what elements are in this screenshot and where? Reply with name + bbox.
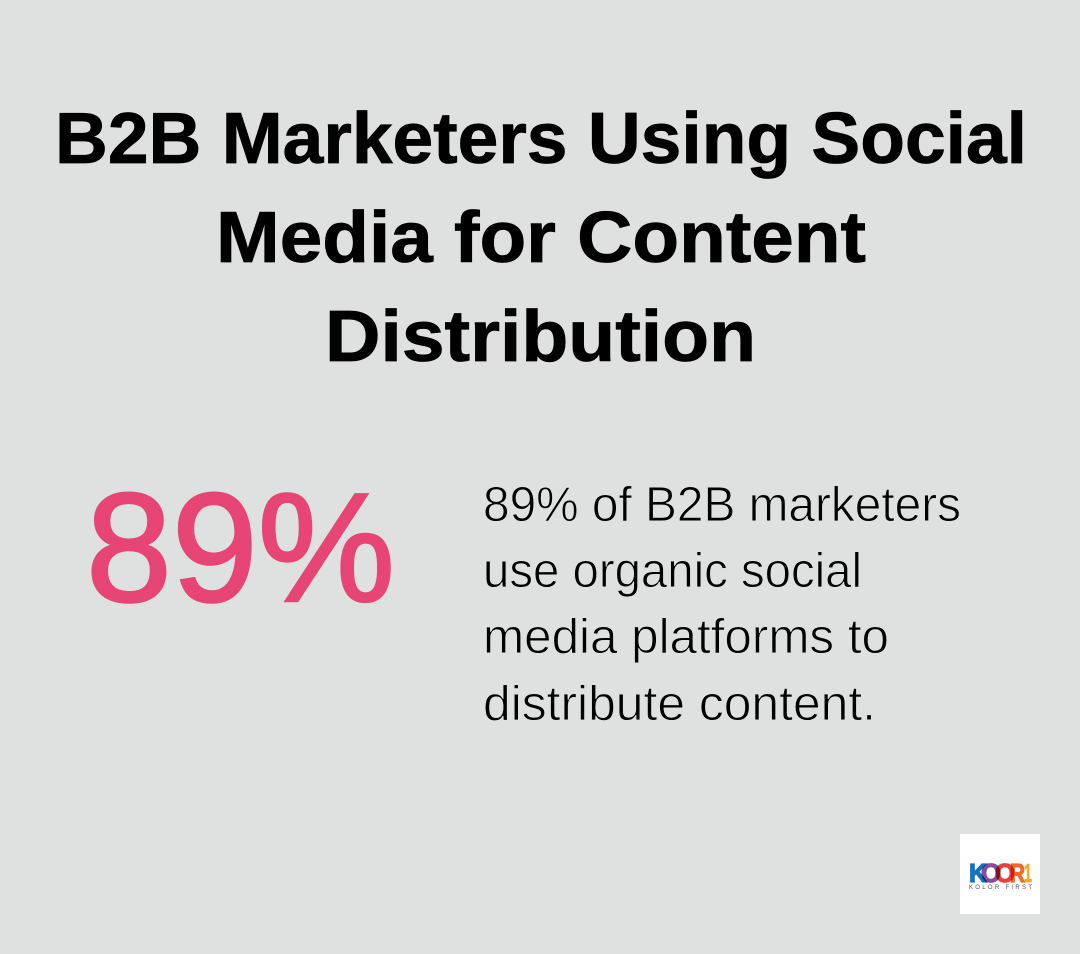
description text [483, 478, 961, 731]
logo: Koor1 Kolor First [960, 834, 1040, 914]
description text: 89% of B2B marketers [483, 478, 961, 532]
logo: Koor1 Kolor First: R [1010, 858, 1025, 888]
title: B2B Marketers Using Social [55, 99, 1027, 179]
logo: Koor1 Kolor First: K [969, 858, 987, 888]
title: Media for Content [216, 198, 866, 278]
description text: media platforms to [483, 610, 889, 664]
logo: Koor1 Kolor First: KOLOR FIRST [969, 885, 1032, 891]
description text: distribute content. [483, 677, 876, 731]
title: Distribution [325, 297, 756, 377]
big stat: 89%: 89% [86, 461, 395, 634]
logo: Koor1 Kolor First: 1 [1024, 858, 1032, 888]
logo: Koor1 Kolor First: O [995, 858, 1015, 888]
logo: Koor1 Kolor First: O [981, 858, 1001, 888]
title [55, 99, 1027, 377]
description text: use organic social [483, 544, 862, 598]
